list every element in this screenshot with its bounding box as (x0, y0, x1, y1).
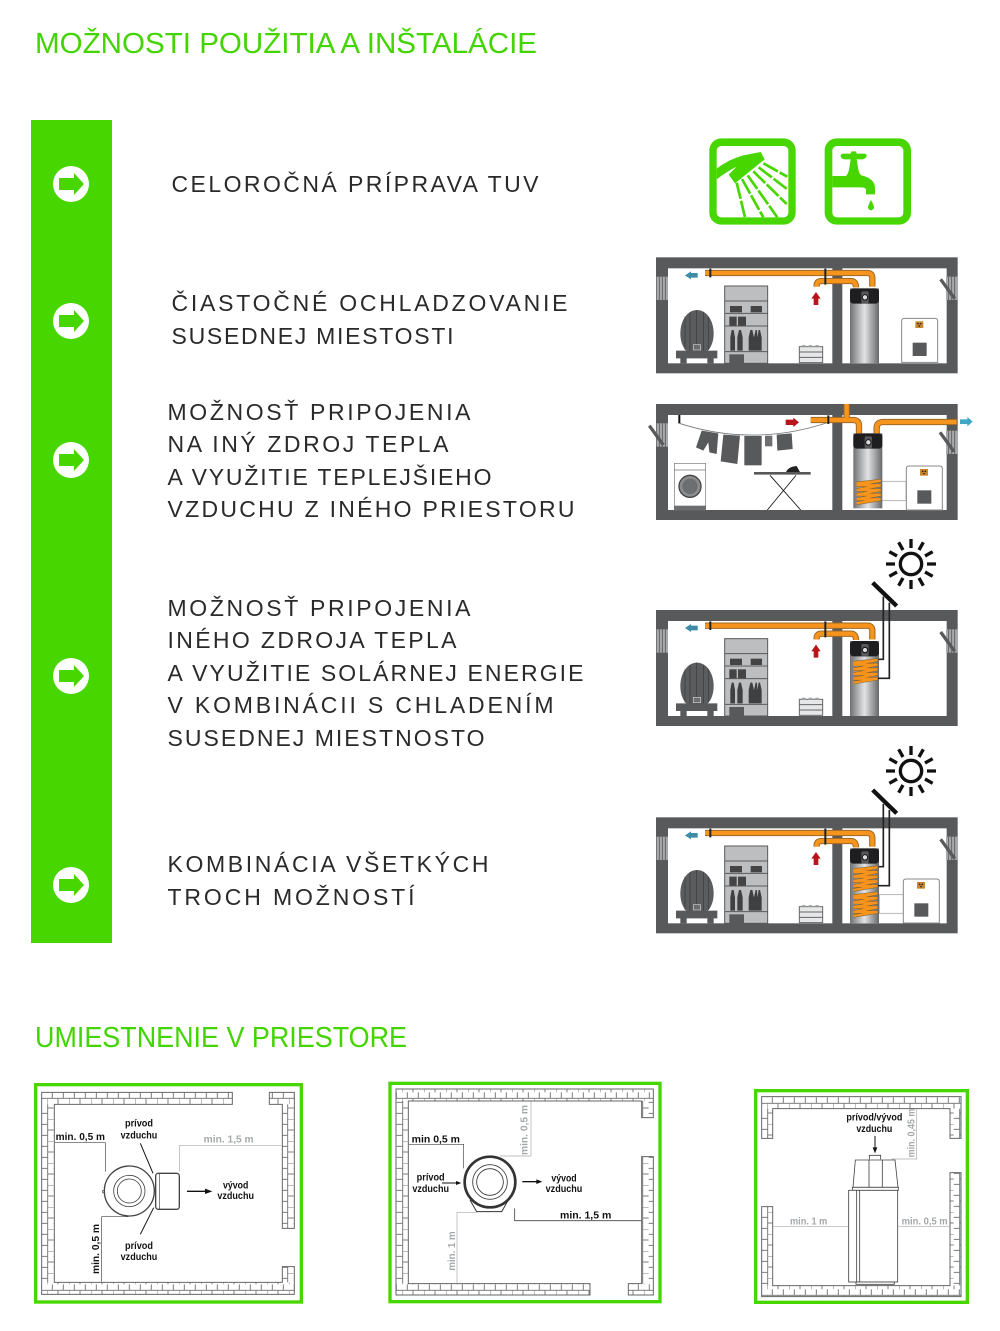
dimension: min. 0,5 m left (55, 1132, 105, 1172)
text block: čiastočné ochladzovanie (172, 289, 568, 349)
label: prívod vzduchu: vzduchu (412, 1184, 449, 1195)
text block: možnosť pripojenia na iný zdroj tepla (168, 399, 574, 522)
label: prívod/vývod vzduchu: prívod/vývod (846, 1113, 902, 1124)
text block: čiastočné ochladzovanie: SUSEDNEJ MIESTOSTI (172, 323, 454, 349)
label: prívod vzduchu bottom: vzduchu (121, 1252, 157, 1263)
label: prívod vzduchu bottom (121, 1208, 157, 1263)
dimension: min. 0,5 m left: min. 0,5 m (56, 1132, 105, 1143)
text block: kombinácia všetkých troch možností: KOMBINÁCIA VŠETKÝCH (168, 850, 488, 877)
diagram: cellar with water heater and boiler (656, 257, 958, 373)
text block: čiastočné ochladzovanie: ČIASTOČNÉ OCHLADZOVANIE (172, 289, 568, 316)
dimension: min. 1 m: min. 1 m (447, 1231, 458, 1271)
dimension: min. 1,5 m (515, 1208, 641, 1221)
label: vývod vzduchu: vývod (551, 1173, 577, 1184)
title: možnosti použitia a inštalácie: MOŽNOSTI POUŽITIA A INŠTALÁCIE (35, 26, 537, 60)
text block: možnosť pripojenia na iný zdroj tepla: A VYUŽITIE TEPLEJŠIEHO (168, 463, 492, 490)
text block: celoročná príprava TUV: CELOROČNÁ PRÍPRAVA TUV (172, 170, 539, 197)
dimension: min. 0,5 m top: min. 0,5 m (520, 1105, 531, 1155)
dimension: min. 1,5 m (179, 1135, 282, 1172)
label: prívod vzduchu (412, 1173, 461, 1195)
dimension: min. 0,5 m bottom: min. 0,5 m (91, 1224, 102, 1274)
icon: arrow bullet 4 (53, 658, 89, 694)
dimension: min. 0,5 m: min. 0,5 m (902, 1217, 948, 1228)
icon: arrow bullet 2 (53, 303, 89, 339)
dimension: min 0,5 m left (409, 1135, 464, 1168)
label: prívod vzduchu: prívod (417, 1173, 445, 1184)
dimension: min. 1 m (773, 1217, 848, 1228)
text block: možnosť pripojenia iného zdroja tepla: MOŽNOSŤ PRIPOJENIA (168, 595, 471, 621)
dimension: min. 0,45 m (892, 1109, 917, 1159)
text block: možnosť pripojenia iného zdroja tepla: SUSEDNEJ MIESTNOSTO (168, 725, 484, 751)
dimension: min. 0,45 m: min. 0,45 m (906, 1109, 917, 1157)
text block: možnosť pripojenia iného zdroja tepla: V KOMBINÁCII S CHLADENÍM (168, 692, 554, 718)
text block: možnosť pripojenia iného zdroja tepla (168, 595, 584, 751)
diagram: cellar with solar collector (656, 539, 958, 726)
dimension: min. 1,5 m: min. 1,5 m (560, 1210, 611, 1221)
text block: možnosť pripojenia na iný zdroj tepla: MOŽNOSŤ PRIPOJENIA (168, 399, 471, 425)
icon: arrow bullet 1 (53, 166, 89, 202)
label: prívod vzduchu top: vzduchu (121, 1130, 157, 1141)
panel: green sidebar with arrow bullets (31, 120, 112, 943)
label: vývod vzduchu: vzduchu (217, 1191, 254, 1202)
dimension: min. 0,5 m top (500, 1102, 531, 1156)
label: prívod vzduchu top (121, 1119, 157, 1173)
icon: arrow bullet 5 (53, 867, 89, 903)
text block: možnosť pripojenia na iný zdroj tepla: VZDUCHU Z INÉHO PRIESTORU (168, 496, 574, 522)
dimension: min. 1 m (447, 1212, 477, 1283)
text block: možnosť pripojenia na iný zdroj tepla: NA INÝ ZDROJ TEPLA (168, 431, 449, 457)
diagram: combination of all three options (656, 746, 958, 933)
device: water heater from above (102, 1166, 179, 1216)
icon: shower (709, 138, 796, 225)
panel: room placement plan 3, side view (756, 1091, 967, 1302)
device: water heater side view (849, 1155, 898, 1284)
text block: kombinácia všetkých troch možností (168, 850, 488, 910)
text block: možnosť pripojenia iného zdroja tepla: INÉHO ZDROJA TEPLA (168, 627, 457, 653)
icon: water tap (825, 138, 911, 225)
label: prívod/vývod vzduchu (846, 1113, 902, 1153)
dimension: min. 0,5 m bottom (91, 1217, 128, 1282)
label: vývod vzduchu: vzduchu (546, 1184, 582, 1195)
label: vývod vzduchu: vývod (223, 1180, 248, 1191)
dimension: min. 1 m: min. 1 m (790, 1217, 827, 1228)
text block: kombinácia všetkých troch možností: TROCH MOŽNOSTÍ (168, 884, 415, 910)
diagram: laundry room with heater connected to another heat source (649, 404, 973, 520)
dimension: min. 1,5 m: min. 1,5 m (204, 1135, 254, 1146)
text block: možnosť pripojenia iného zdroja tepla: A VYUŽITIE SOLÁRNEJ ENERGIE (168, 660, 584, 686)
panel: room placement plan 1 (36, 1085, 301, 1302)
label: prívod vzduchu top: prívod (125, 1119, 153, 1130)
device: water heater from above (465, 1157, 515, 1212)
dimension: min 0,5 m left: min 0,5 m (412, 1135, 460, 1146)
panel: room placement plan 2 (390, 1083, 660, 1302)
label: vývod vzduchu (187, 1180, 254, 1202)
label: prívod vzduchu bottom: prívod (125, 1241, 153, 1252)
label: vývod vzduchu (522, 1173, 582, 1195)
label: prívod/vývod vzduchu: vzduchu (856, 1124, 892, 1135)
heading: umiestnenie v priestore: UMIESTNENIE V PRIESTORE (35, 1022, 407, 1054)
icon: arrow bullet 3 (53, 442, 89, 478)
